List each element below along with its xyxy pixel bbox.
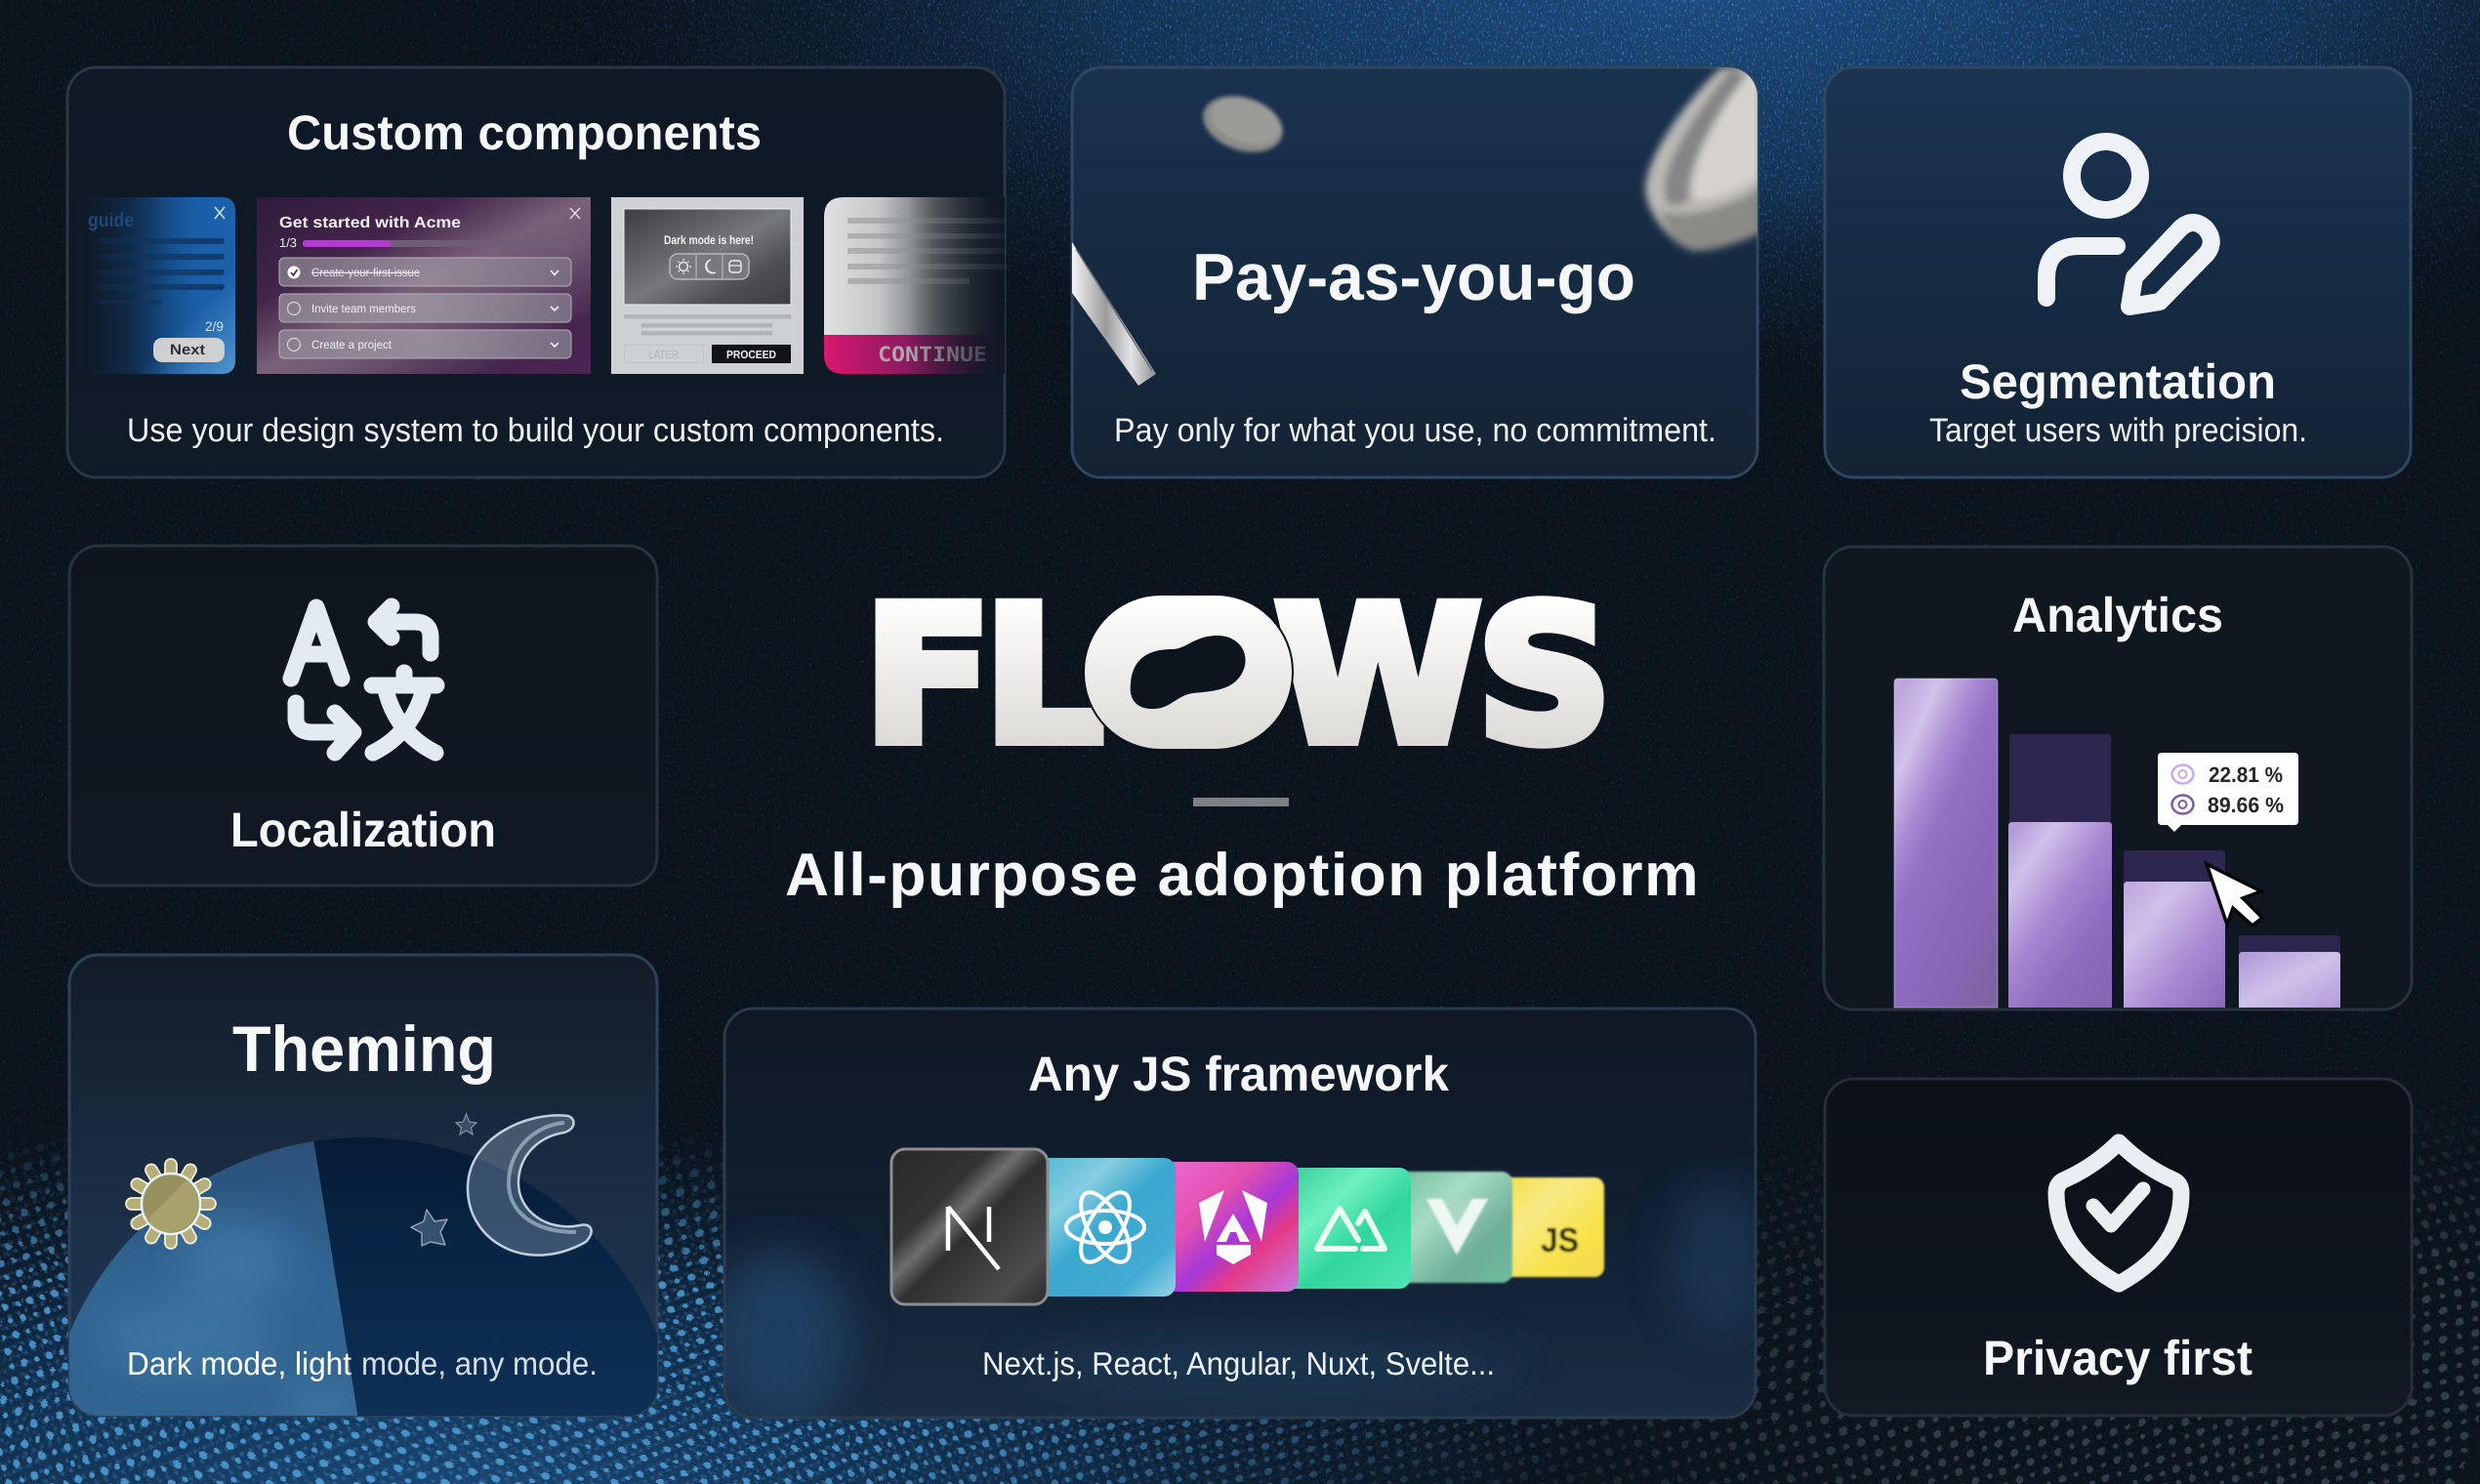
logo: O with blob counter [1084,595,1293,750]
tile: JS: JS [1541,1221,1579,1259]
description: theming [127,1345,598,1381]
icon: large star [411,1210,447,1246]
icon: mouse cursor [2207,864,2262,926]
icon: shield with check [2056,1142,2181,1284]
preview: blue tour card: guide [88,210,134,231]
description: pay-as-you-go: Pay only for what you use, no commitment. [1114,412,1716,449]
tooltip: 22.81 % [2209,763,2283,787]
heading: segmentation: Segmentation [1960,354,2276,409]
tile: JS [1494,1177,1604,1277]
bar chart [1894,679,2340,1008]
tooltip [2158,753,2298,832]
tile: Nuxt [1279,1168,1411,1289]
logo: FLOWS: FLOWS [864,568,1612,785]
preview: Get started with Acme checklist: Create-your-first-issue [311,266,420,279]
heading: privacy first: Privacy first [1983,1331,2253,1385]
panel: custom components [67,67,1006,477]
description: any JS framework: Next.js, React, Angular, Nuxt, Svelte... [982,1345,1495,1381]
heading: pay-as-you-go: Pay-as-you-go [1192,240,1635,314]
tile: Vue [1396,1172,1512,1283]
icon: user with pencil [2046,142,2211,307]
tile: React [1025,1158,1176,1297]
panel: privacy first [1825,1079,2412,1416]
preview: dark mode announcement [611,197,804,374]
heading: any JS framework: Any JS framework [1028,1047,1449,1101]
heading: localization: Localization [230,803,496,857]
preview: Get started with Acme checklist: Create a project [311,338,393,351]
preview: dark mode announcement: PROCEED [726,350,776,361]
preview: blue tour card [88,197,235,374]
preview: dark mode announcement: Dark mode is here! [664,233,754,247]
preview: continue banner card: CONTINUE [878,343,987,366]
tagline: All-purpose adoption platform [785,842,1700,909]
icon: falling silver coins [1072,64,1761,386]
preview: dark mode announcement: LATER [648,350,679,361]
preview: Get started with Acme checklist: 1/3 [279,235,297,250]
panel: theming [39,955,683,1425]
heading: theming: Theming [232,1012,496,1085]
preview: continue banner card [824,197,1006,374]
preview: Get started with Acme checklist [257,197,591,374]
icon: sun [126,1159,216,1249]
panel: pay-as-you-go [1072,64,1761,477]
preview: Get started with Acme checklist: Get started with Acme [279,215,461,231]
UI component previews [69,197,1006,374]
framework logos row [891,1149,1604,1304]
preview: blue tour card: Next [170,342,205,358]
heading: custom components: Custom components [287,105,762,160]
icon: crescent moon [468,1115,592,1256]
preview: blue tour card: 2/9 [205,319,224,334]
tooltip: 89.66 % [2208,793,2284,817]
divider [1193,798,1289,806]
icon: small star [456,1114,476,1134]
icon: translate [291,606,436,753]
panel: segmentation [1825,67,2411,477]
panel: localization [69,546,657,886]
description: theming: Dark mode, light [127,1345,351,1381]
panel: analytics [1824,547,2412,1010]
tile: Next.js [891,1149,1048,1304]
panel: any JS framework [713,1009,1767,1425]
heading: analytics: Analytics [2012,588,2223,642]
description: theming: mode, any mode. [361,1345,598,1381]
illustration: day and night dome [69,1137,657,1416]
tile: Angular [1162,1162,1299,1292]
preview: Get started with Acme checklist: Invite team members [311,302,416,315]
description: segmentation: Target users with precision. [1929,412,2307,449]
description: custom components: Use your design system to build your custom components. [127,412,944,449]
